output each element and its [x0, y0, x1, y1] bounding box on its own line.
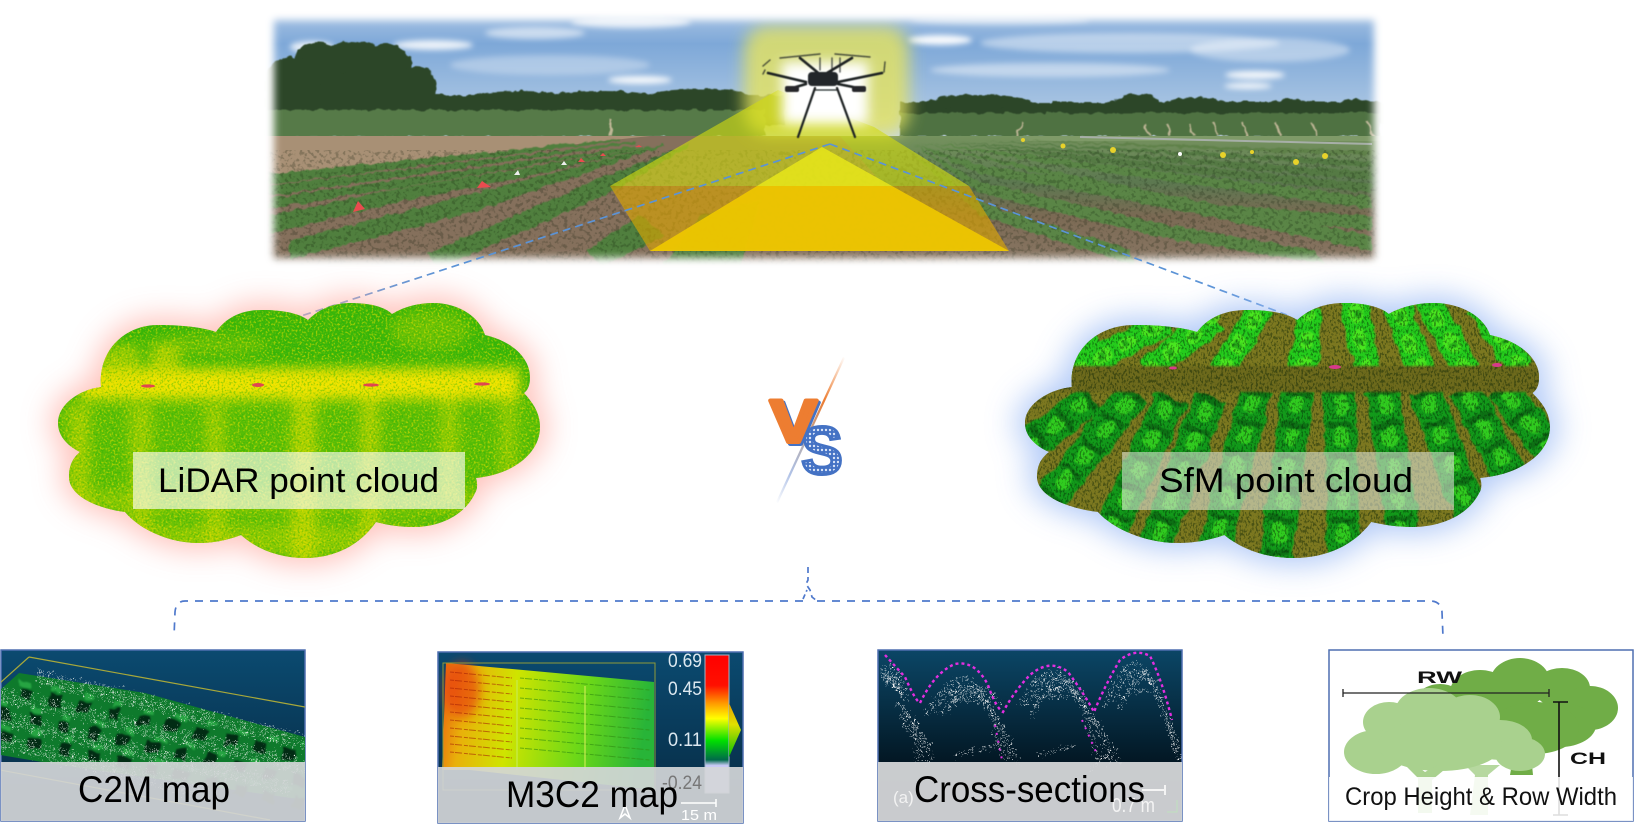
blue glow: [1025, 303, 1550, 558]
scan triangle lower: [650, 186, 1009, 251]
scan frustum upper: [610, 90, 969, 186]
caption crop: [1329, 777, 1633, 821]
caption Cross-sections: Cross-sections: [914, 769, 1145, 810]
panel: SfM point cloud: [1000, 290, 1570, 570]
label SfM: [1122, 452, 1454, 510]
letter V: V: [770, 388, 817, 455]
colour scale: [668, 651, 741, 793]
tree line: [264, 42, 1390, 138]
crop rows right: [905, 140, 1372, 266]
label SfM: SfM point cloud: [1159, 462, 1413, 500]
scan triangle upper: [757, 147, 892, 186]
panel: Cross-sections: [878, 650, 1182, 821]
bracket connector: [174, 567, 1443, 637]
crop height marker: [1553, 702, 1568, 815]
icon: VS emblem: [770, 357, 845, 503]
row width marker: [1343, 689, 1549, 697]
panel: LiDAR point cloud: [40, 290, 560, 570]
crop rows left: [268, 139, 760, 270]
caption Cross-sections: (a): [893, 788, 914, 807]
sky: [268, 15, 1380, 136]
dashed connectors from photo to clouds: [298, 144, 1287, 317]
flags: [353, 138, 1328, 212]
SfM cloud image: [1025, 303, 1550, 558]
letter S: S: [801, 413, 843, 489]
CH label: CH: [1570, 749, 1606, 768]
caption M3C2: -0.24: [662, 773, 702, 794]
caption C2M: C2M map: [78, 769, 230, 810]
white drone backdrop: [782, 62, 868, 124]
LiDAR cloud image: [40, 290, 560, 570]
caption crop: Crop Height & Row Width: [1345, 783, 1617, 811]
drone: [763, 54, 885, 137]
panel: Crop Height and Row Width: [1329, 650, 1633, 821]
photo: crop field with drone: [260, 10, 1390, 270]
caption Cross-sections: 0.7 m: [1112, 795, 1155, 817]
panel: C2M map: [0, 650, 305, 821]
colour scale: 0.11: [668, 730, 702, 751]
C2M point rows: [0, 657, 305, 820]
dark tree: [1412, 658, 1618, 775]
letter V: V: [772, 390, 819, 457]
scatter plot: [882, 653, 1178, 770]
light tree: [1344, 688, 1545, 815]
field texture: [260, 150, 1390, 265]
caption Cross-sections: [878, 762, 1182, 821]
pink glow: [58, 303, 540, 558]
panel: M3C2 map: [438, 651, 743, 824]
M3C2 deviation map: [442, 662, 655, 790]
caption M3C2: M3C2 map: [506, 774, 678, 815]
caption C2M: [1, 762, 305, 821]
label LiDAR: LiDAR point cloud: [158, 462, 439, 500]
RW label: RW: [1417, 668, 1464, 687]
slash: [776, 357, 845, 503]
caption M3C2: [438, 767, 743, 824]
label LiDAR: [133, 452, 465, 509]
scan frustum lower: [610, 186, 1009, 251]
yellow glow around drone: [744, 26, 909, 136]
field ground: [260, 136, 1390, 270]
colour scale: 0.45: [668, 679, 702, 700]
colour scale: 0.69: [668, 651, 702, 672]
caption M3C2: 15 m: [681, 807, 717, 824]
